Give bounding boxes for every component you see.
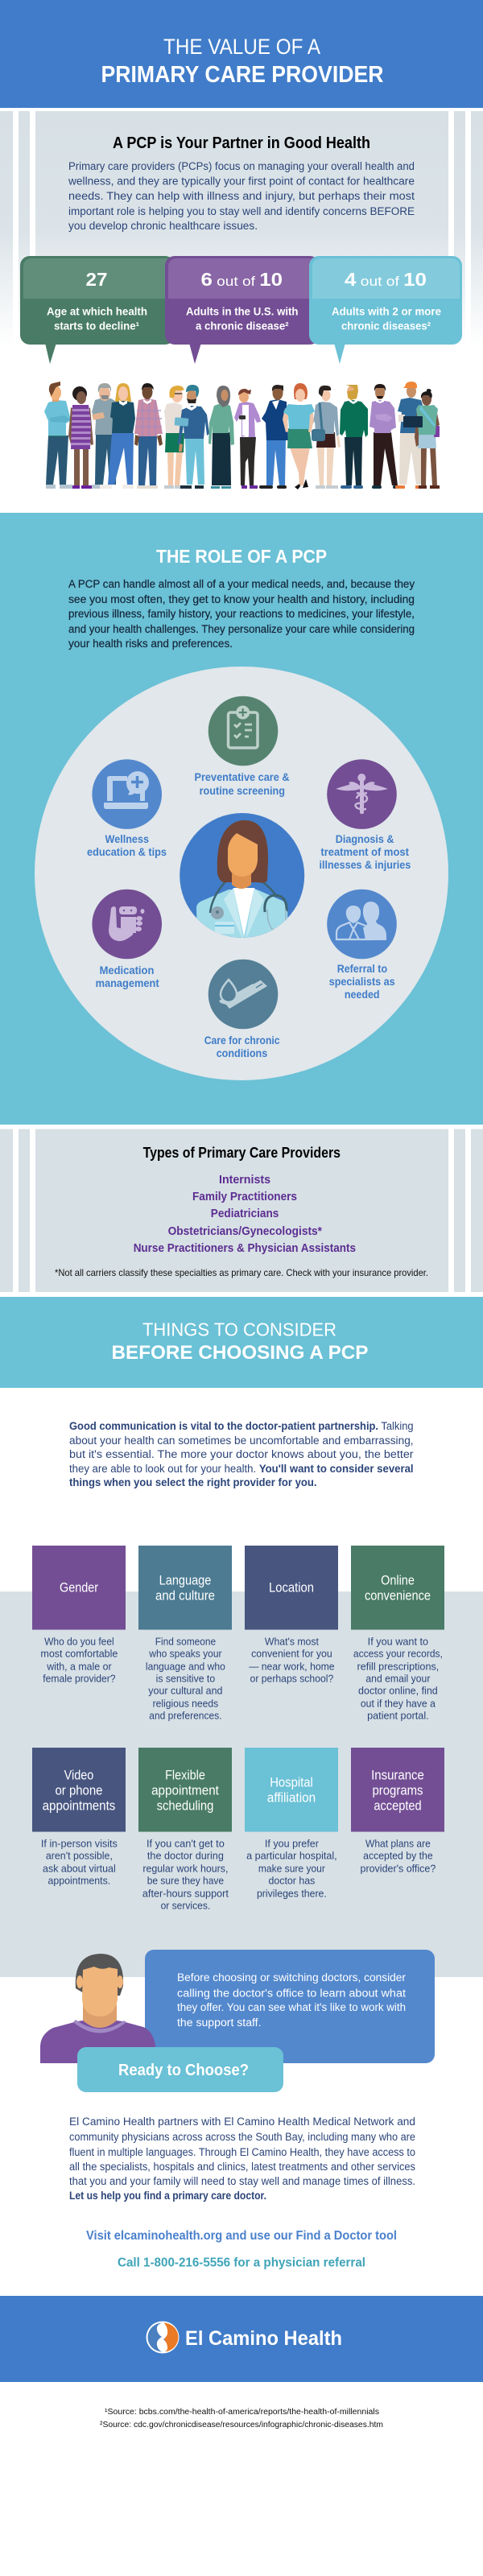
provider list: Obstetricians/Gynecologists* [168, 1224, 322, 1238]
text block: good communication: but it's essential. The more your doctor knows about you, the better [69, 1448, 414, 1460]
card: language and culture: and preferences. [149, 1710, 222, 1721]
icon: two specialists [327, 890, 397, 959]
footer banner with logo [0, 2296, 483, 2382]
p13 [340, 385, 368, 489]
card: video or phone appointments: appointments [43, 1798, 115, 1813]
card: hospital affiliation: privileges there. [257, 1889, 327, 1900]
icon: blood drop and test strip [208, 960, 278, 1029]
stat card: 4 out of 10: 4 out of 10 [345, 269, 427, 290]
callout: before choosing [145, 1950, 435, 2063]
section text: see you most often, they get to know your health and history, including [68, 593, 415, 605]
stat card: 4 out of 10: chronic diseases² [341, 319, 431, 332]
provider list [134, 1173, 356, 1255]
provider list: Family Practitioners [192, 1190, 297, 1203]
stat card: 27: starts to decline¹ [54, 319, 139, 332]
stat card: 4 out of 10: Adults with 2 or more [332, 304, 441, 317]
intro text block: needs. They can help with illness and injury, but perhaps their most [68, 190, 415, 202]
p15 [395, 382, 424, 489]
icon: clipboard checklist [208, 696, 278, 766]
card: language and culture: who speaks your [148, 1649, 222, 1660]
provider list: Pediatricians [211, 1207, 279, 1220]
card: location: — near work, home [249, 1662, 335, 1673]
card: video or phone appointments [32, 1748, 126, 1887]
card: language and culture: and culture [155, 1587, 215, 1604]
p9 [234, 389, 261, 489]
card: insurance programs: accepted by the [363, 1850, 433, 1861]
card: flexible scheduling: regular work hours, [142, 1863, 228, 1874]
title [101, 35, 384, 88]
card: language and culture: Language [159, 1573, 211, 1587]
card: gender: most comfortable [40, 1649, 118, 1660]
button: ready to choose: Ready to Choose? [118, 2062, 249, 2079]
label: diagnosis: treatment of most [320, 845, 409, 858]
label: medication: Medication [100, 964, 154, 976]
card: gender [32, 1546, 126, 1684]
label: medication: management [96, 976, 159, 989]
label: referral: needed [345, 988, 380, 1001]
text block: el camino health partners: fluent in multiple languages. Through El Camino Health, they have access to [69, 2146, 415, 2158]
card: flexible scheduling: be sure they have [147, 1876, 224, 1887]
label: preventative care: routine screening [200, 784, 285, 797]
card: online convenience: and email your [365, 1673, 430, 1684]
card: online convenience: refill prescriptions, [357, 1662, 439, 1673]
card: flexible scheduling: the doctor during [147, 1850, 224, 1861]
card: video or phone appointments: Video [64, 1768, 93, 1782]
card: online convenience: doctor online, find [358, 1686, 438, 1697]
label: wellness: Wellness [105, 832, 149, 845]
card: location: What's most [265, 1636, 319, 1647]
stat card: 27: 27 [85, 269, 108, 290]
label: wellness [87, 832, 167, 858]
p3 [92, 383, 118, 489]
label: chronic conditions [204, 1034, 280, 1059]
card: language and culture: language and who [146, 1662, 225, 1673]
banner: things to consider: THINGS TO CONSIDER [142, 1319, 336, 1340]
p12 [312, 386, 341, 489]
card: hospital affiliation [245, 1748, 338, 1900]
card: language and culture: religious needs [153, 1699, 218, 1710]
icon: laptop with health bubble [92, 759, 162, 829]
text block: good communication [69, 1420, 414, 1488]
doctor illustration [180, 813, 304, 942]
label: referral: Referral to [337, 962, 387, 975]
section text: your health risks and preferences. [68, 638, 233, 650]
call to action: website: Visit elcaminohealth.org and use our Find a Doctor tool [86, 2229, 397, 2243]
card: insurance programs [351, 1748, 444, 1874]
illustration: patient [40, 1954, 156, 2063]
card: flexible scheduling: after-hours support [142, 1889, 229, 1900]
text block: good communication: Good communication is vital to the doctor-patient partnership. Talking [69, 1420, 414, 1432]
card: gender: Who do you feel [44, 1636, 114, 1647]
panel heading: A PCP is Your Partner in Good Health [113, 134, 370, 152]
label: diagnosis: Diagnosis & [336, 832, 394, 845]
p16 [403, 389, 440, 489]
intro text block: you develop chronic healthcare issues. [68, 220, 258, 232]
p4 [100, 383, 135, 489]
button: ready to choose [77, 2047, 283, 2092]
card: insurance programs: What plans are [365, 1839, 431, 1850]
text block: good communication: things when you select the right provider for you. [69, 1476, 317, 1488]
stat card: 6 out of 10: a chronic disease² [196, 319, 289, 332]
card: gender: female provider? [43, 1673, 116, 1684]
sources: ²Source: cdc.gov/chronicdisease/resources/infographic/chronic-diseases.htm [100, 2421, 383, 2429]
label: medication [96, 964, 159, 989]
icon: caduceus [327, 759, 397, 829]
card: hospital affiliation: make sure your [258, 1863, 325, 1874]
banner: things to consider: BEFORE CHOOSING A PCP [111, 1342, 368, 1364]
panel: types of primary care providers [0, 1129, 483, 1292]
label: referral [329, 962, 395, 1001]
label: preventative care [195, 770, 290, 797]
label: diagnosis: illnesses & injuries [319, 858, 411, 871]
provider list: Internists [219, 1173, 270, 1187]
icon: el camino logo [147, 2322, 179, 2354]
card: hospital affiliation: affiliation [267, 1790, 316, 1805]
card: flexible scheduling [138, 1748, 232, 1911]
section text [68, 578, 415, 650]
card: flexible scheduling: scheduling [157, 1798, 213, 1813]
card: insurance programs: accepted [374, 1798, 422, 1813]
card: video or phone appointments: If in-person visits [41, 1839, 118, 1850]
text block: el camino health partners: community physicians across across the South Bay, including many who are [69, 2131, 415, 2143]
card: video or phone appointments: aren't possible, [46, 1850, 113, 1861]
card: hospital affiliation: Hospital [270, 1774, 313, 1790]
provider list: Nurse Practitioners & Physician Assistants [134, 1241, 356, 1255]
card: language and culture [138, 1546, 232, 1721]
card: gender: with, a male or [46, 1662, 112, 1673]
section heading: THE ROLE OF A PCP [156, 546, 327, 567]
intro text block [68, 160, 415, 232]
card: video or phone appointments: ask about virtual [43, 1863, 116, 1874]
card: hospital affiliation: doctor has [269, 1876, 315, 1887]
label: preventative care: Preventative care & [195, 770, 290, 783]
large circle panel [35, 667, 448, 1080]
card: online convenience: patient portal. [367, 1710, 429, 1721]
intro text block: important role is helping you to stay well and identify concerns BEFORE [68, 205, 415, 217]
card: gender: Gender [60, 1579, 98, 1596]
title: PRIMARY CARE PROVIDER [101, 62, 384, 88]
text block: el camino health partners: all the specialists, hospitals and clinics, latest treatments and other services [69, 2161, 415, 2173]
card: location [245, 1546, 338, 1684]
card: flexible scheduling: If you can't get to [147, 1839, 225, 1850]
p10 [259, 385, 288, 489]
intro text block: Primary care providers (PCPs) focus on managing your overall health and [68, 160, 415, 172]
footnote: *Not all carriers classify these specialties as primary care. Check with your insurance provider. [55, 1267, 428, 1278]
stat card: 27: Age at which health [47, 304, 147, 317]
text block: el camino health partners: El Camino Health partners with El Camino Health Medical Network and [69, 2116, 415, 2128]
p6 [164, 386, 184, 489]
section text: A PCP can handle almost all of a your medical needs, and, because they [68, 578, 415, 590]
label: diagnosis [319, 832, 411, 871]
card: hospital affiliation: a particular hospital, [246, 1850, 337, 1861]
text block: el camino health partners [69, 2116, 415, 2202]
banner: things to consider [0, 1297, 483, 1388]
text block: el camino health partners: that you and your family will need to stay well and manage times of illness. [69, 2175, 415, 2187]
stat card: 6 out of 10 [165, 256, 320, 364]
label: chronic conditions: Care for chronic [204, 1034, 280, 1046]
stat card: 4 out of 10 [309, 256, 462, 364]
card: flexible scheduling: Flexible [165, 1768, 205, 1782]
card: video or phone appointments: appointments. [48, 1876, 110, 1887]
text block: good communication: about your health can sometimes be uncomfortable and embarrassing, [69, 1435, 414, 1447]
card: online convenience: If you want to [368, 1636, 428, 1647]
card: language and culture: your cultural and [148, 1686, 223, 1697]
card: language and culture: is sensitive to [156, 1673, 215, 1684]
card: online convenience: access your records, [353, 1649, 443, 1660]
text block: good communication: they are able to look out for your health. You'll want to consider several [69, 1463, 414, 1475]
panel heading: Types of Primary Care Providers [143, 1145, 341, 1161]
label: referral: specialists as [329, 975, 395, 988]
card: location: convenient for you [251, 1649, 332, 1660]
card: location: Location [269, 1579, 314, 1596]
callout: before choosing: Before choosing or switching doctors, consider [177, 1971, 406, 1984]
label: wellness: education & tips [87, 845, 167, 858]
card: flexible scheduling: appointment [151, 1782, 219, 1798]
call to action: phone: Call 1-800-216-5556 for a physician referral [118, 2256, 365, 2270]
callout: before choosing: the support staff. [177, 2017, 261, 2029]
callout: before choosing: they offer. You can see what it's like to work with [177, 2001, 406, 2013]
card: online convenience: out if they have a [361, 1699, 436, 1710]
panel: partner in good health [0, 111, 483, 346]
footer banner with logo: El Camino Health [185, 2327, 342, 2350]
card: language and culture: Find someone [155, 1636, 216, 1647]
card: insurance programs: provider's office? [361, 1863, 436, 1874]
section text: previous illness, family history, your reactions to medicines, your lifestyle, [68, 608, 415, 620]
p11 [283, 383, 315, 489]
intro text block: wellness, and they are typically your first point of contact for healthcare [68, 175, 415, 187]
stat card: 27 [20, 256, 175, 364]
illustration: group of people [44, 382, 440, 489]
stat card: 6 out of 10: Adults in the U.S. with [186, 304, 298, 317]
card: video or phone appointments: or phone [55, 1782, 103, 1798]
p8 [208, 386, 234, 489]
background band [0, 1591, 483, 1977]
p5 [134, 383, 163, 489]
card: insurance programs: programs [372, 1782, 423, 1798]
section text: and your health challenges. They personalize your care while considering [68, 623, 415, 635]
card: online convenience: convenience [365, 1587, 431, 1604]
stat card: 6 out of 10: 6 out of 10 [201, 269, 283, 290]
p1 [44, 382, 72, 489]
card: location: or perhaps school? [250, 1673, 333, 1684]
card: insurance programs: Insurance [371, 1768, 424, 1782]
text block: el camino health partners: Let us help you find a primary care doctor. [69, 2190, 266, 2202]
title: THE VALUE OF A [163, 35, 320, 59]
card: online convenience: Online [381, 1573, 415, 1587]
card: online convenience [351, 1546, 444, 1721]
sources: ¹Source: bcbs.com/the-health-of-america/reports/the-health-of-millennials [105, 2408, 379, 2417]
p7 [175, 385, 209, 489]
callout: before choosing: calling the doctor's office to learn about what [177, 1987, 406, 2000]
card: hospital affiliation: If you prefer [265, 1839, 319, 1850]
card: flexible scheduling: or services. [161, 1900, 210, 1911]
sources [100, 2408, 383, 2429]
header banner [0, 0, 483, 108]
p14 [369, 384, 399, 489]
label: chronic conditions: conditions [217, 1046, 267, 1059]
icon: hand holding pill bottle [92, 890, 162, 959]
section: the role of a PCP [0, 513, 483, 1125]
p2 [68, 386, 94, 489]
